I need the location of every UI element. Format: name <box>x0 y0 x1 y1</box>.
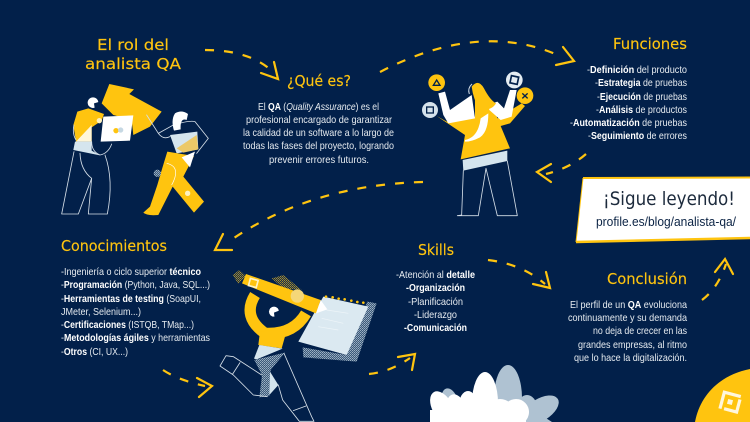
heading: knowledge: Conocimientos <box>61 237 167 255</box>
text block: functions list: -Definición del producto <box>587 65 687 76</box>
logo corner <box>695 369 750 422</box>
text block: what is it: El QA (Quality Assurance) es el <box>258 102 379 113</box>
heading: functions: Funciones <box>613 35 687 53</box>
arrow: long arrow to knowledge <box>215 182 423 250</box>
heading: conclusion: Conclusión <box>607 270 687 288</box>
arrow: knowledge to running figure <box>163 370 212 397</box>
text block: what is it: todas las fases del proyecto, logrando <box>243 141 394 152</box>
text block: knowledge list <box>61 267 210 358</box>
head <box>269 307 279 317</box>
arrow: title to what is it <box>205 50 278 79</box>
waist <box>463 151 507 171</box>
text block: knowledge list: -Programación (Python, Java, SQL...) <box>61 280 210 291</box>
text block: skills list: -Liderazgo <box>414 310 457 321</box>
illustration: running person with pencil and notebook <box>220 270 377 421</box>
illustration: cloud at bottom <box>425 365 564 422</box>
title <box>85 36 182 73</box>
leg stipple <box>254 353 285 397</box>
text block: functions list: -Estrategia de pruebas <box>595 78 687 89</box>
notebook shadow <box>303 302 377 362</box>
text block: functions list <box>570 65 687 142</box>
right person <box>143 111 208 215</box>
arms <box>250 295 306 333</box>
text block: functions list: -Automatización de pruebas <box>570 118 687 129</box>
left person head <box>88 97 99 108</box>
title: El rol del <box>97 36 169 54</box>
arrow: running figure to skills <box>369 354 415 374</box>
callout: keep reading: ¡Sigue leyendo! <box>603 188 735 210</box>
icon: logo mark <box>720 392 741 413</box>
text block: conclusion: continuamente y su demanda <box>568 313 687 324</box>
callout: keep reading: profile.es/blog/analista-qa/ <box>596 215 736 229</box>
text block: skills list: -Organización <box>406 283 465 294</box>
heading: skills: Skills <box>418 241 454 259</box>
torso <box>258 328 287 348</box>
yellow lower arms and sweater <box>437 97 525 159</box>
arrow: what is it to functions <box>380 41 574 72</box>
heading: what is it: ¿Qué es? <box>287 72 351 90</box>
text block: what is it: la calidad de un software a lo largo de <box>243 128 394 139</box>
arrow: functions to centre figure <box>537 154 586 182</box>
hair and pencil texture <box>233 270 246 284</box>
callout: keep reading <box>576 178 750 242</box>
text block: skills list <box>396 270 475 334</box>
text block: conclusion <box>568 300 687 364</box>
text block: functions list: -Análisis de productos <box>596 105 687 116</box>
text block: knowledge list: JMeter, Selenium...) <box>61 307 141 318</box>
text block: knowledge list: -Otros (CI, UX...) <box>61 347 128 358</box>
arrow: conclusion to callout <box>702 259 733 300</box>
text block: conclusion: no deja de crecer en las <box>593 326 687 337</box>
white arms <box>438 92 475 123</box>
text block: knowledge list: -Metodologías ágiles y herramientas <box>61 333 210 344</box>
text block: functions list: -Ejecución de pruebas <box>597 92 687 103</box>
text block: what is it: profesional encargado de garantizar <box>246 115 392 126</box>
pencil <box>242 274 321 313</box>
illustration: person juggling icons <box>422 72 533 216</box>
text block: skills list: -Planificación <box>408 297 463 308</box>
text block: conclusion: El perfil de un QA evoluciona <box>570 300 687 311</box>
arrow: skills to conclusion <box>488 260 550 288</box>
big yellow arrow <box>102 84 162 135</box>
text block: functions list: -Seguimiento de errores <box>588 131 687 142</box>
text block: skills list: -Comunicación <box>404 323 467 334</box>
legs outline <box>220 356 267 397</box>
text block: conclusion: que lo hace la digitalización. <box>574 353 687 364</box>
text block: what is it <box>243 102 394 166</box>
hair <box>472 83 496 110</box>
notebook <box>298 297 368 355</box>
illustration: two people with arrow and laptop <box>62 84 208 215</box>
title: analista QA <box>85 55 182 73</box>
text block: knowledge list: -Herramientas de testing (SoapUI, <box>61 294 201 305</box>
text block: conclusion: grandes empresas, al ritmo <box>578 340 687 351</box>
legs <box>457 161 517 216</box>
left person <box>62 108 133 214</box>
icon circles <box>422 72 533 118</box>
text block: knowledge list: -Ingeniería o ciclo superior técnico <box>61 267 201 278</box>
text block: skills list: -Atención al detalle <box>396 270 475 281</box>
text block: knowledge list: -Certificaciones (ISTQB, TMap...) <box>61 320 194 331</box>
text block: what is it: prevenir errores futuros. <box>269 155 369 166</box>
